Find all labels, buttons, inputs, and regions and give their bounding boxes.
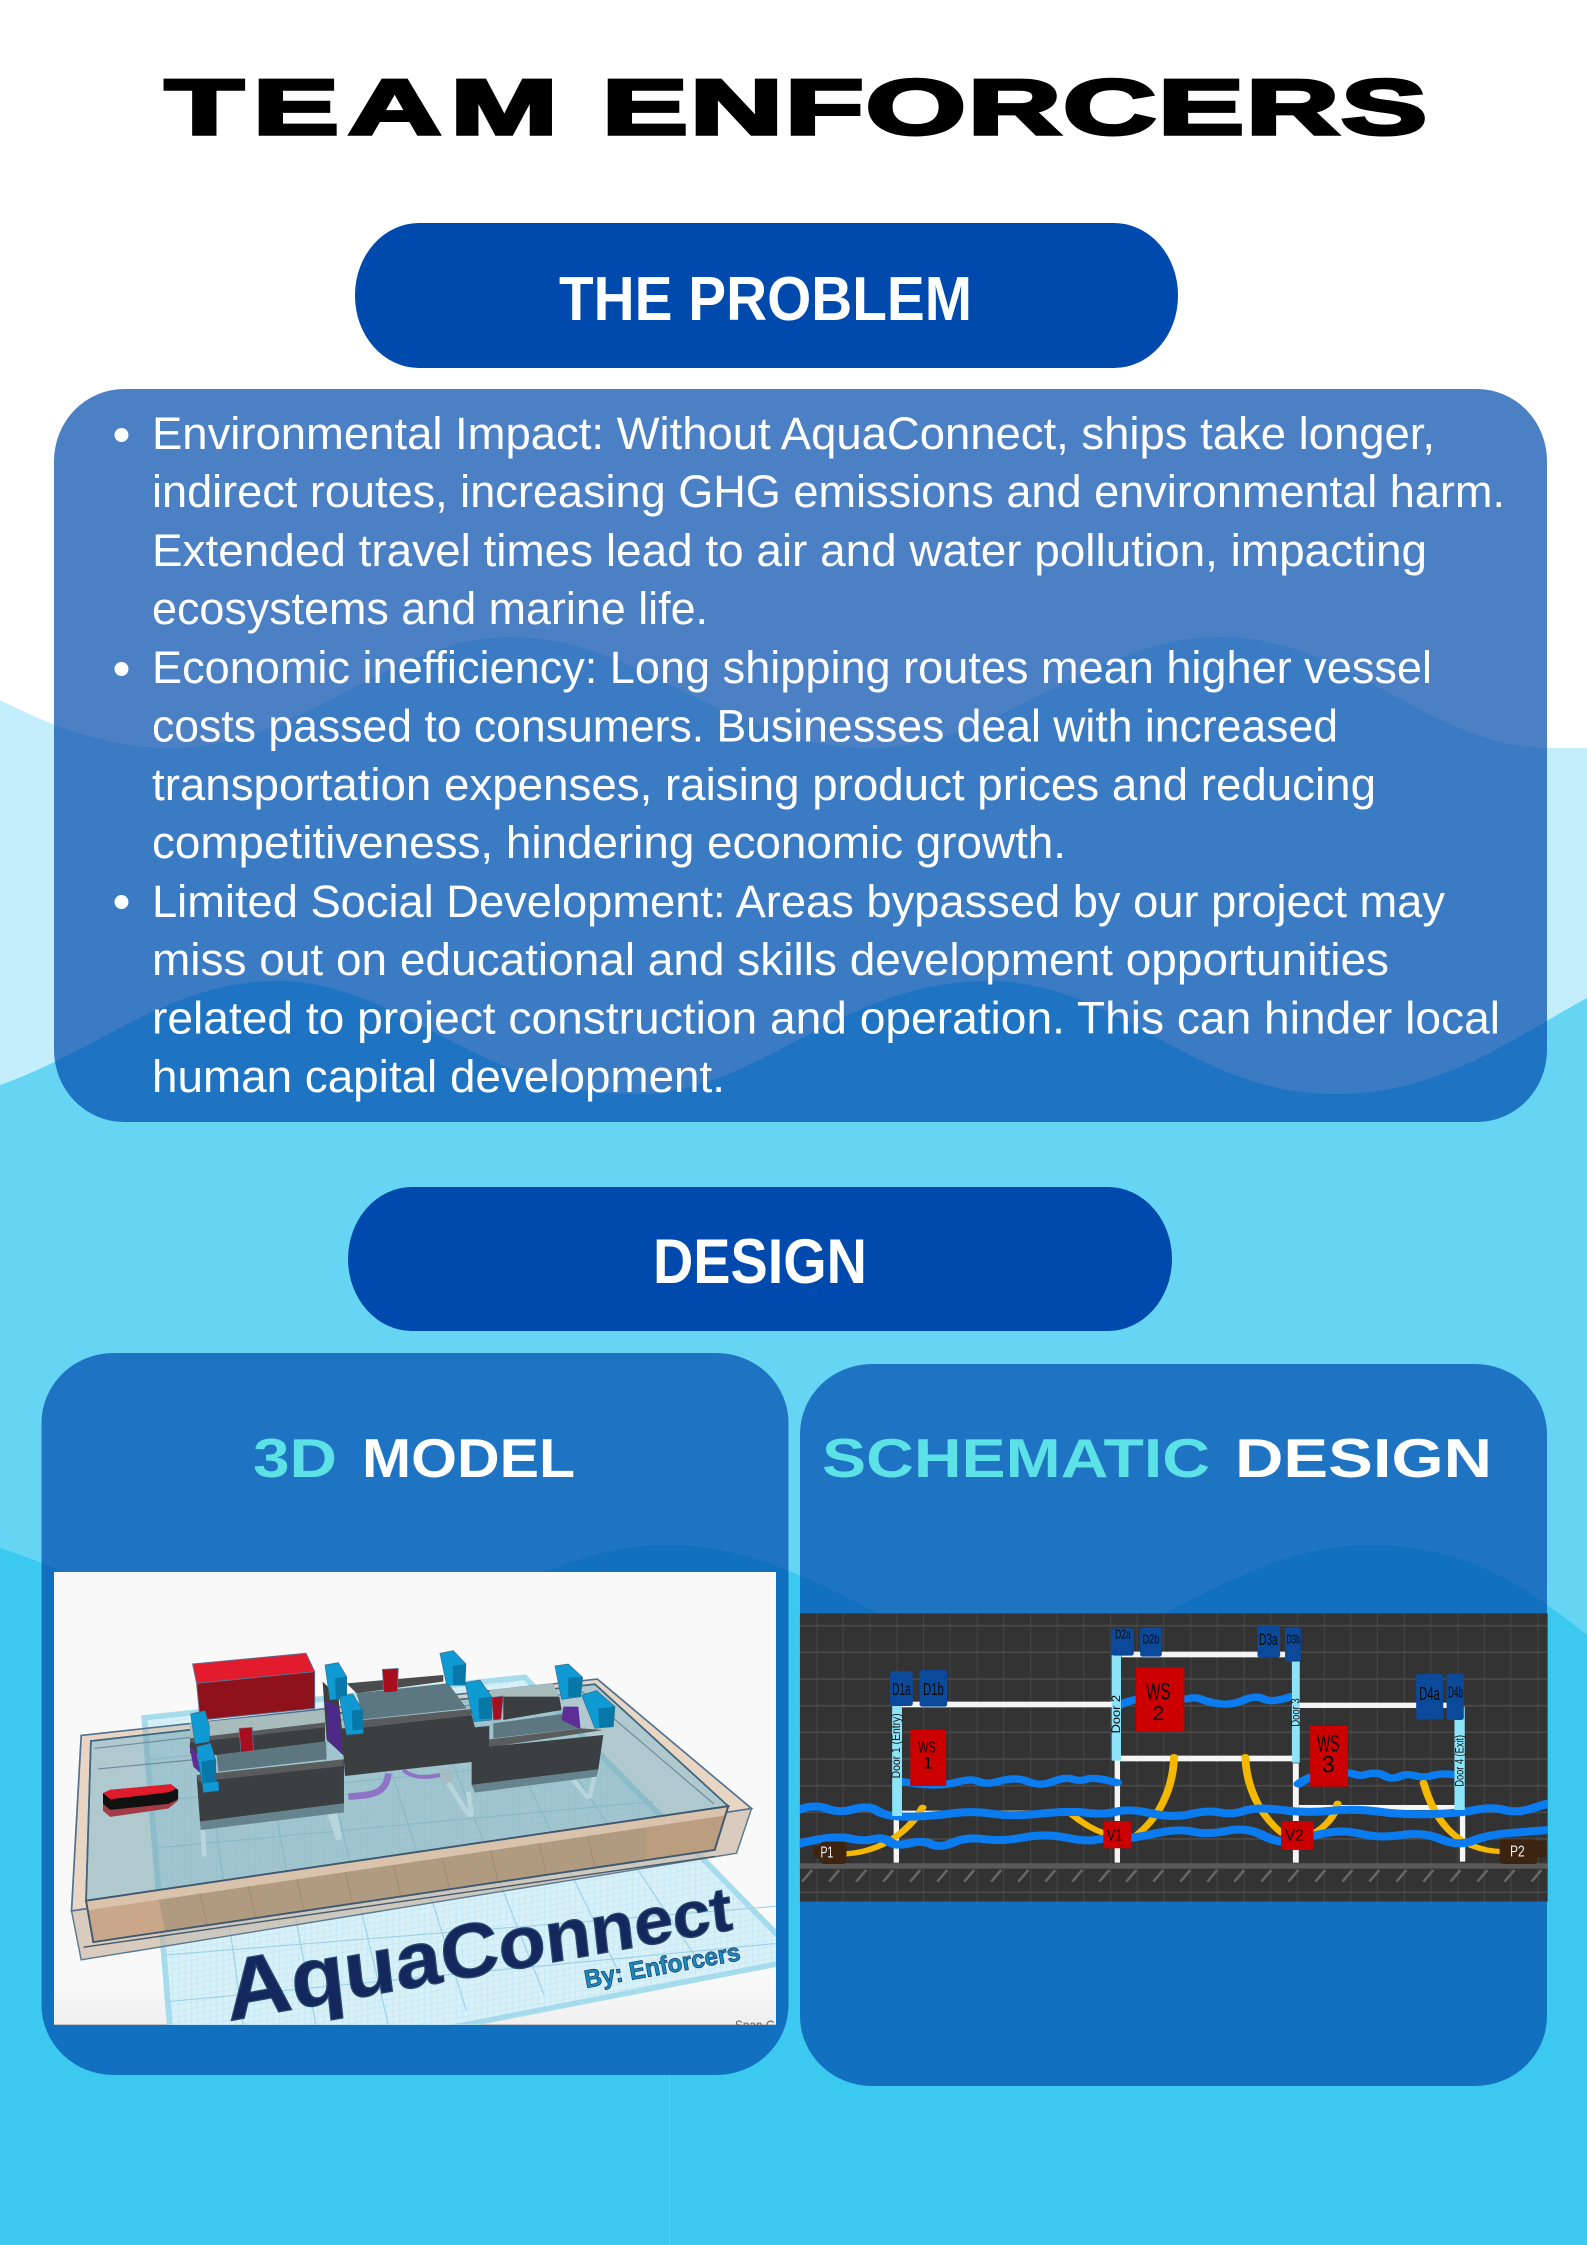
workstations and valves: 3 <box>1322 1752 1335 1778</box>
bullet: environmental impact: indirect routes, increasing GHG emissions and environmental harm. <box>152 466 1505 517</box>
door actuators <box>890 1626 1464 1720</box>
workstations and valves: 2 <box>1152 1703 1164 1725</box>
door actuators: D2b <box>1143 1631 1159 1647</box>
image: schematic drawing <box>800 1613 1549 1902</box>
doors: Door 1 (Entry) <box>891 1713 904 1778</box>
bullet: economic inefficiency: costs passed to consumers. Businesses deal with increased <box>152 700 1338 752</box>
bullet: environmental impact <box>114 408 1505 634</box>
right workshop <box>448 1664 615 1817</box>
label: snap grid: Snap G <box>735 2017 775 2033</box>
heading: schematic design <box>822 1427 1492 1489</box>
bullet: limited social development: miss out on educational and skills development opportunities <box>152 934 1389 985</box>
heading: schematic design: DESIGN <box>1235 1427 1492 1489</box>
tank front wall <box>86 1806 728 1942</box>
doors: Door 4 (Exit) <box>1454 1735 1467 1787</box>
bullet: limited social development: human capital development. <box>152 1051 725 1102</box>
left workshop <box>189 1710 344 1857</box>
image: 3D model render <box>54 1572 779 2040</box>
door actuators: D2a <box>1115 1627 1131 1642</box>
workstations and valves: WS <box>1317 1731 1340 1757</box>
title: TEAM <box>165 64 558 151</box>
panel: schematic design <box>800 1364 1549 2086</box>
tank <box>72 1679 752 1960</box>
white structural beams <box>894 1652 1465 1863</box>
bullet: environmental impact: ecosystems and marine life. <box>152 583 708 634</box>
centre workshop <box>323 1651 492 1776</box>
doors: Door 2 <box>1111 1694 1124 1733</box>
bullet: limited social development: Limited Social Development: Areas bypassed by our project may <box>152 876 1445 927</box>
heading: 3D model: 3D <box>253 1427 337 1489</box>
heading: schematic design: SCHEMATIC <box>822 1427 1210 1489</box>
door actuators: D1a <box>892 1678 911 1699</box>
workstations and valves: WS <box>918 1739 936 1757</box>
bullet: economic inefficiency: Economic inefficiency: Long shipping routes mean higher vessel <box>152 642 1432 693</box>
doors <box>891 1655 1467 1816</box>
title <box>165 64 1427 151</box>
heading: design <box>348 1187 1172 1331</box>
door actuators: D4a <box>1419 1683 1440 1704</box>
workplane grid <box>144 1677 779 2027</box>
heading: the problem <box>355 223 1178 368</box>
bullet: environmental impact: Environmental Impact: Without AquaConnect, ships take longer, <box>152 408 1435 459</box>
heading: 3D model: MODEL <box>362 1427 575 1489</box>
heading: the problem: THE PROBLEM <box>559 265 972 334</box>
yellow pipes <box>842 1757 1502 1854</box>
bullet: economic inefficiency <box>114 642 1432 868</box>
heading: 3D model <box>253 1427 575 1489</box>
panel: problem text <box>54 389 1547 1122</box>
door actuators: D1b <box>923 1678 944 1699</box>
purple pipes <box>348 1768 453 1797</box>
door actuators: D3b <box>1287 1631 1300 1647</box>
upper water channels <box>903 1697 1455 1785</box>
pumps <box>814 1839 1546 1864</box>
image: schematic drawing: D4b <box>1448 1684 1463 1701</box>
logo text: AquaConnect <box>221 1853 736 2040</box>
bullet: limited social development <box>114 876 1500 1102</box>
doors: Door 3 <box>1290 1698 1303 1727</box>
bullet: environmental impact: Extended travel times lead to air and water pollution, impacting <box>152 525 1427 576</box>
bullet: limited social development: related to project construction and operation. This can hinder local <box>152 992 1500 1044</box>
workstations and valves: 1 <box>924 1754 932 1772</box>
workstations and valves: V2 <box>1285 1826 1304 1845</box>
bullet: economic inefficiency: competitiveness, hindering economic growth. <box>152 817 1066 868</box>
workstations and valves: V1 <box>1107 1826 1122 1845</box>
workstations and valves <box>910 1667 1348 1850</box>
workstations and valves: WS <box>1146 1679 1171 1705</box>
logo text: By: Enforcers <box>582 1938 743 1994</box>
pumps: P1 <box>820 1845 833 1861</box>
panel: 3D model <box>42 1353 788 2075</box>
pumps: P2 <box>1510 1844 1525 1861</box>
title: ENFORCERS <box>602 64 1427 151</box>
lower water <box>800 1804 1549 1846</box>
big red storage box <box>193 1653 315 1719</box>
boat <box>103 1784 178 1817</box>
door actuators: D3a <box>1259 1631 1278 1649</box>
ground with hatching <box>800 1863 1548 1882</box>
bullet: economic inefficiency: transportation expenses, raising product prices and reducing <box>152 759 1376 810</box>
heading: design: DESIGN <box>653 1227 867 1297</box>
